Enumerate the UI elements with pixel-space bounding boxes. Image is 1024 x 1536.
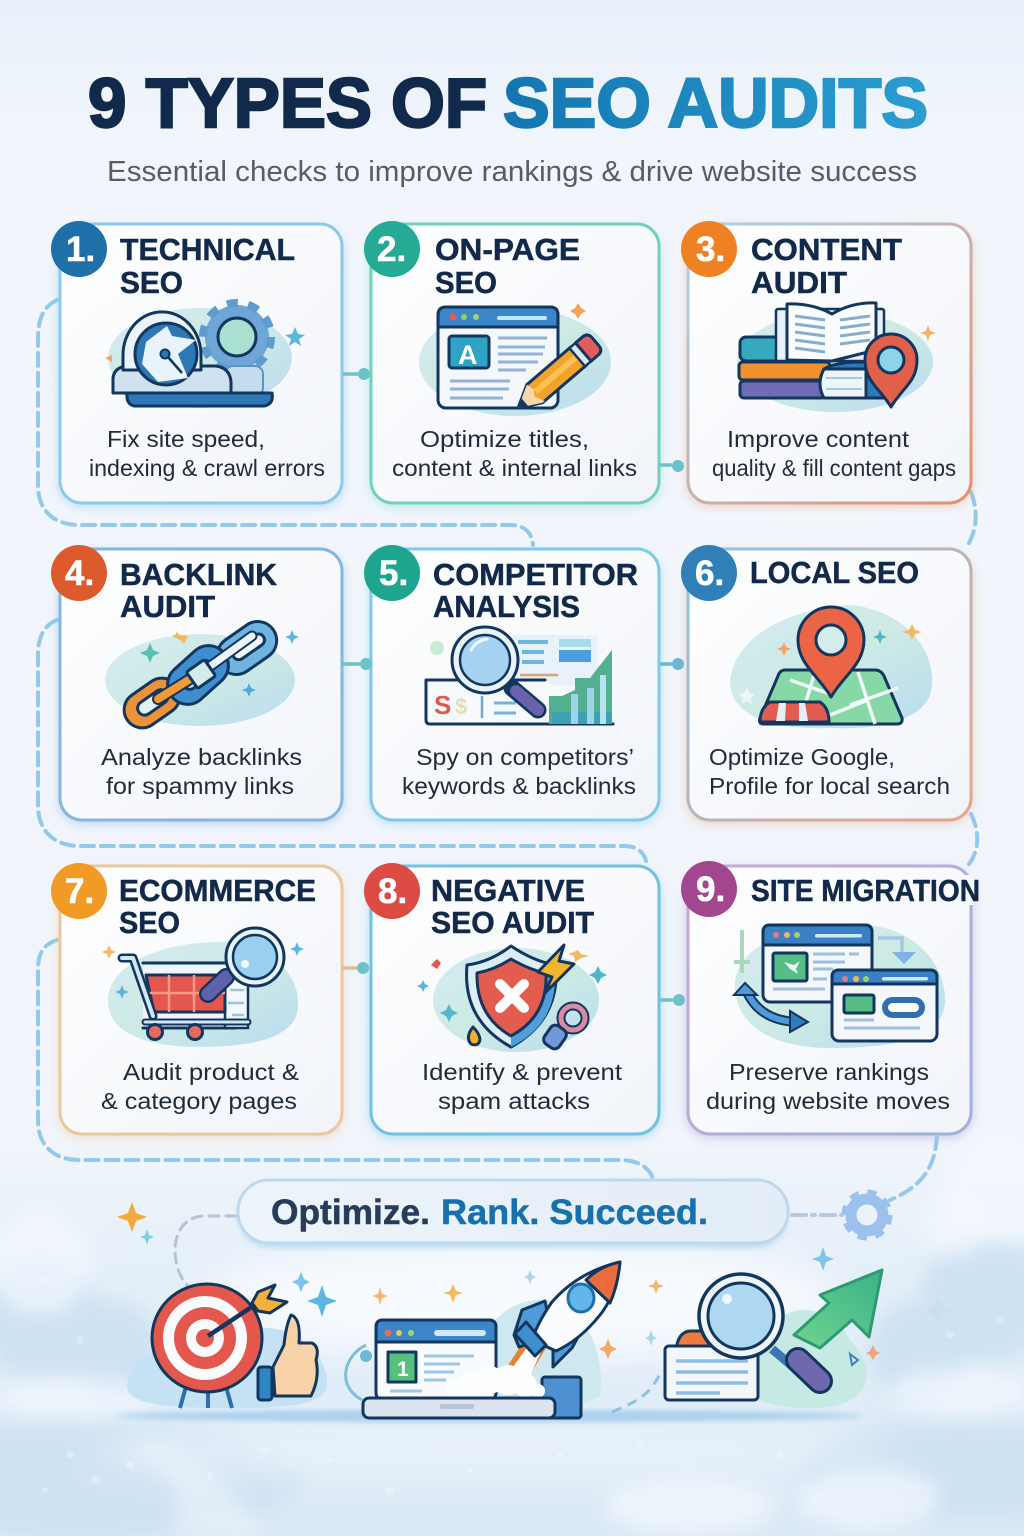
description: Preserve rankings — [729, 1059, 929, 1085]
icon: shopping cart and magnifier — [102, 928, 304, 1047]
heading: ON-PAGE — [435, 232, 580, 267]
dashed connector: row 2 to row 3 — [38, 620, 646, 861]
description: Improve content — [727, 426, 910, 452]
heading: BACKLINK — [120, 557, 278, 592]
description — [89, 426, 325, 481]
badge 9 — [681, 861, 737, 917]
panel: on-page seo — [364, 221, 661, 507]
description: Optimize titles, — [420, 426, 589, 452]
description: for spammy links — [106, 773, 294, 799]
icon: gear — [845, 1193, 889, 1237]
panel: content audit — [681, 221, 973, 507]
heading — [120, 232, 295, 300]
badge 1 — [51, 221, 107, 277]
heading: ANALYSIS — [433, 589, 580, 624]
description — [709, 744, 950, 799]
description: content & internal links — [392, 455, 637, 481]
arrow: connector 8 to 9 — [660, 994, 685, 1006]
description: spam attacks — [438, 1088, 590, 1114]
description: Analyze backlinks — [101, 744, 302, 770]
icon: magnifier and charts — [426, 627, 613, 724]
description: indexing & crawl errors — [89, 455, 325, 481]
icon: web page and pencil — [419, 303, 611, 417]
badge 1: 1. — [66, 230, 95, 269]
icon: map pin and storefront — [730, 605, 932, 728]
icon: books and location pin — [737, 303, 936, 412]
arrow: connector 2 to 3 — [660, 460, 684, 472]
badge 4 — [51, 545, 107, 601]
arrow: connector 4 to 5 — [343, 658, 372, 670]
badge 9: 9. — [696, 870, 725, 909]
description: Optimize Google, — [709, 744, 895, 770]
heading — [751, 232, 902, 300]
dashed connector: pill to target — [175, 1216, 236, 1286]
badge 2: 2. — [377, 230, 406, 269]
description: Fix site speed, — [107, 426, 265, 452]
heading: SEO — [120, 265, 183, 300]
badge 5: 5. — [379, 554, 408, 593]
badge 2 — [364, 221, 420, 277]
arrow: connector 5 to 6 — [660, 658, 684, 670]
title: 9 TYPES OF — [88, 64, 487, 142]
panel: site migration — [681, 861, 980, 1138]
panel: technical seo — [51, 221, 344, 507]
heading — [120, 557, 278, 624]
icon: document, magnifier and growth arrow — [612, 1270, 882, 1412]
icon: migrating browser windows — [734, 925, 945, 1048]
title — [88, 64, 928, 142]
dashed connector: card 9 to gear — [890, 1136, 937, 1200]
badge 8 — [364, 863, 420, 919]
badge 4: 4. — [65, 554, 94, 593]
icon: web page and pencil: A — [458, 340, 478, 370]
description: keywords & backlinks — [402, 773, 636, 799]
heading: LOCAL SEO — [750, 555, 919, 590]
tagline pill: Optimize. — [271, 1193, 430, 1232]
tagline pill: Rank. Succeed. — [441, 1193, 708, 1232]
dashed connector: row 3 to footer — [38, 940, 653, 1179]
badge 5 — [364, 545, 420, 601]
heading: COMPETITOR — [433, 557, 638, 592]
dashed connector: pill to gear — [792, 1213, 842, 1217]
badge 8: 8. — [378, 872, 407, 911]
icon: gauge and gear — [105, 303, 305, 408]
description: Spy on competitors’ — [416, 744, 634, 770]
heading — [433, 557, 638, 624]
badge 3 — [681, 221, 737, 277]
heading — [119, 873, 316, 940]
description — [402, 744, 636, 799]
heading: TECHNICAL — [120, 232, 295, 267]
icon: magnifier and charts: S — [434, 690, 451, 720]
description: quality & fill content gaps — [712, 455, 956, 481]
heading: SEO — [435, 265, 497, 300]
icon: shield, lightning and padlock — [417, 945, 607, 1052]
icon: browser with rocket launch — [346, 1262, 620, 1418]
panel: local seo — [681, 545, 973, 824]
heading: CONTENT — [751, 232, 902, 267]
heading: AUDIT — [751, 265, 847, 300]
icon: chain links — [105, 614, 299, 735]
badge 7: 7. — [65, 872, 94, 911]
dashed connector: card 6 to card 9 — [966, 814, 977, 868]
description — [712, 426, 956, 481]
badge 7 — [51, 863, 107, 919]
icon: sparkles — [117, 1202, 951, 1359]
arrow: connector 7 to 8 — [343, 962, 369, 974]
subtitle: Essential checks to improve rankings & drive website success — [107, 156, 917, 188]
heading: ECOMMERCE — [119, 873, 316, 908]
dashed connector: row 1 to row 2 — [38, 300, 533, 545]
panel: backlink audit — [51, 545, 344, 824]
badge 6: 6. — [695, 554, 724, 593]
description: & category pages — [101, 1088, 297, 1114]
heading: SEO — [119, 905, 180, 940]
panel: competitor analysis — [364, 545, 661, 824]
icon: target with arrow and thumbs up — [127, 1284, 327, 1408]
description — [101, 1059, 299, 1114]
heading: SITE MIGRATION — [751, 873, 980, 908]
tagline pill — [238, 1180, 788, 1248]
description — [706, 1059, 950, 1114]
title: SEO AUDITS — [503, 64, 928, 142]
badge 3: 3. — [696, 230, 725, 269]
panel: ecommerce seo — [51, 863, 344, 1138]
description — [392, 426, 637, 481]
heading: SEO AUDIT — [431, 905, 594, 940]
heading — [435, 232, 580, 300]
dashed connector: card 3 to card 6 — [966, 492, 976, 548]
icon: browser with rocket launch: 1 — [397, 1358, 409, 1381]
panel: negative seo audit — [364, 863, 661, 1138]
description: Audit product & — [123, 1059, 299, 1085]
icon: magnifier and charts: $ — [455, 694, 467, 719]
heading: AUDIT — [120, 589, 215, 624]
badge 6 — [681, 545, 737, 601]
description — [101, 744, 302, 799]
heading: NEGATIVE — [431, 873, 585, 908]
description: during website moves — [706, 1088, 950, 1114]
heading — [431, 873, 594, 940]
description — [422, 1059, 623, 1114]
arrow: connector 1 to 2 — [343, 368, 370, 380]
description: Profile for local search — [709, 773, 950, 799]
description: Identify & prevent — [422, 1059, 623, 1085]
